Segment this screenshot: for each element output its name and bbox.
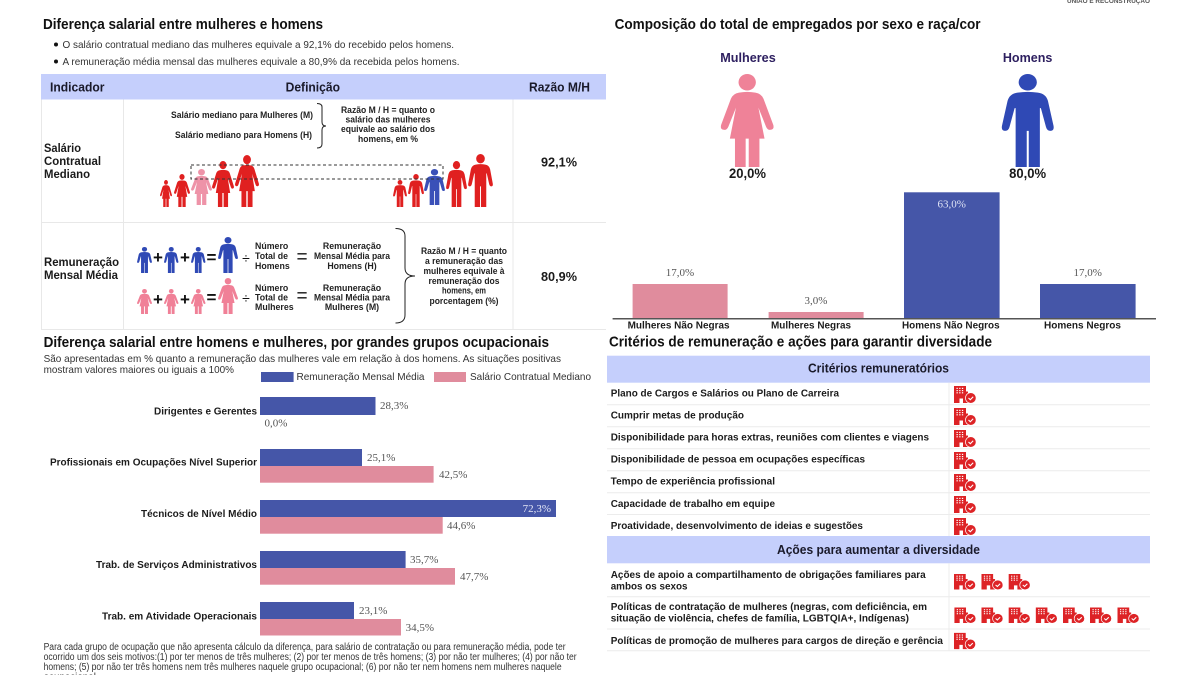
bullet list — [54, 39, 460, 68]
median definition text: Razão M / H = quanto o — [341, 105, 436, 115]
brace and ratio explanation: Razão M / H = quanto — [421, 246, 508, 256]
table: actions: Ações para aumentar a diversidade — [777, 542, 980, 557]
row label: remuneracao media: Remuneração — [44, 257, 119, 269]
heading: occupational groups: Diferença salarial entre homens e mulheres, por grandes grupos ocupacionais — [44, 334, 549, 351]
median definition text: equivale ao salário dos — [341, 124, 435, 134]
bar chart: occupations: 47,7% — [460, 571, 488, 583]
footnote: Para cada grupo de ocupação que não apresenta cálculo da diferença, para salário de contratação ou para remuneração média, pode ter — [44, 642, 566, 653]
action labels: Políticas de contratação de mulheres (negras, com deficiência, em — [611, 602, 927, 613]
equation: men: Homens (H) — [327, 261, 377, 271]
value: 92,1%: 92,1% — [541, 154, 577, 170]
bar chart: race and sex: Homens Não Negros — [902, 320, 1000, 332]
equation: women: = — [207, 288, 217, 307]
footnote: ocorrido um dos seis motivos:(1) por ter menos de três mulheres; (2) por ter menos de três homens; (3) por não ter mulheres; (4) por não ter — [44, 652, 577, 663]
bar chart: race and sex: Mulheres Negras — [771, 320, 851, 332]
bar chart: occupations: Trab. de Serviços Administrativos — [96, 560, 257, 571]
action labels — [611, 570, 943, 647]
row label: salario contratual — [44, 143, 101, 181]
bullet list: A remuneração média mensal das mulheres equivale a 80,9% da recebida pelos homens. — [62, 56, 460, 68]
brace and ratio explanation: remuneração dos — [428, 276, 500, 286]
equation: men: = — [296, 247, 308, 268]
equation: men — [137, 237, 390, 273]
bar chart: occupations: 42,5% — [439, 469, 467, 481]
bar chart: occupations: 0,0% — [264, 418, 287, 430]
equation: women: + — [180, 290, 190, 309]
heading: criteria: Critérios de remuneração e ações para garantir diversidade — [609, 334, 992, 351]
criteria labels: Disponibilidade de pessoa em ocupações específicas — [611, 455, 865, 466]
dashed median connector — [191, 165, 443, 179]
panel: salary gap — [41, 16, 606, 330]
bar chart: occupations: 35,7% — [410, 554, 438, 566]
footnote: homens; (5) por não ter três homens nem três mulheres naquele grupo ocupacional; (6) por não ter nem homens nem mulheres naquele — [44, 662, 562, 673]
explanatory text — [44, 353, 561, 376]
equation: women: = — [296, 286, 308, 307]
bar chart: occupations — [50, 397, 556, 636]
criteria labels — [611, 389, 929, 532]
men total: Homens — [1003, 50, 1052, 65]
brace and ratio explanation: mulheres equivale à — [424, 266, 505, 276]
median definition text: Salário mediano para Mulheres (M) — [171, 110, 313, 120]
equation: women: Mulheres — [255, 302, 294, 312]
action labels: ambos os sexos — [611, 582, 688, 592]
bar chart: occupations: Trab. em Atividade Operacionais — [102, 612, 257, 622]
bar chart: occupations: Técnicos de Nível Médio — [141, 509, 257, 520]
equation: women — [137, 278, 390, 314]
explanatory text: São apresentadas em % quanto a remuneração das mulheres vale em relação à dos homens. As situações positivas — [44, 353, 561, 365]
brace and ratio explanation: porcentagem (%) — [430, 296, 499, 306]
equation: men: Total de — [255, 251, 288, 261]
footnote — [44, 642, 577, 675]
bar chart: race and sex: 3,0% — [805, 295, 827, 307]
table: criteria — [607, 356, 1150, 536]
heading: composition: Composição do total de empregados por sexo e raça/cor — [615, 16, 981, 33]
median definition text: salário das mulheres — [346, 114, 431, 124]
icons: men ranked by salary — [393, 154, 493, 207]
bar chart: occupations: 23,1% — [359, 605, 387, 617]
panel: criteria and actions — [607, 334, 1150, 651]
row label: remuneracao media — [44, 257, 119, 282]
equation: men: Mensal Média para — [314, 251, 390, 261]
equation: women: ÷ — [242, 290, 250, 306]
bar chart: occupations: 28,3% — [380, 400, 408, 412]
median definition text: Salário mediano para Homens (H) — [175, 130, 312, 140]
action labels: Ações de apoio a compartilhamento de obrigações familiares para — [611, 570, 926, 581]
legend — [261, 371, 591, 383]
women total: Mulheres — [720, 50, 776, 65]
brace and ratio explanation: homens, em — [442, 286, 486, 296]
bar chart: race and sex — [613, 192, 1156, 332]
row label: salario contratual: Salário — [44, 143, 81, 155]
bar chart: occupations: Dirigentes e Gerentes — [154, 406, 257, 418]
table: criteria: Critérios remuneratórios — [808, 360, 949, 376]
bar chart: race and sex: 17,0% — [666, 267, 694, 279]
median definition text — [171, 104, 436, 148]
heading: salary gap: Diferença salarial entre mulheres e homens — [43, 16, 323, 33]
bar chart: race and sex: 17,0% — [1073, 267, 1102, 279]
action labels: Políticas de promoção de mulheres para cargos de direção e gerência — [611, 636, 943, 647]
equation: women: Mulheres (M) — [325, 302, 379, 312]
icons: companies per action — [954, 574, 1139, 650]
brace and ratio explanation — [396, 228, 508, 323]
equation: women: Remuneração — [323, 283, 382, 293]
table header: Indicador — [50, 80, 104, 94]
bar chart: occupations: Profissionais em Ocupações Nível Superior — [50, 458, 257, 468]
men total: 80,0% — [1009, 166, 1046, 181]
panel: occupational groups — [44, 334, 591, 675]
table: indicators — [41, 74, 606, 330]
row label: salario contratual: Contratual — [44, 156, 101, 168]
table header — [50, 80, 590, 94]
equation: women: Mensal Média para — [314, 292, 390, 302]
brace and ratio explanation: a remuneração das — [425, 256, 503, 266]
table header: Razão M/H — [529, 80, 590, 94]
action labels: situação de violência, chefes de família, LGBTQIA+, Indígenas) — [611, 614, 909, 625]
bar chart: occupations: 34,5% — [406, 622, 434, 634]
icons: women ranked by salary — [160, 155, 259, 207]
criteria labels: Disponibilidade para horas extras, reuniões com clientes e viagens — [611, 433, 929, 444]
equation: men: Homens — [255, 261, 290, 271]
criteria labels: Tempo de experiência profissional — [611, 477, 775, 488]
panel: composition — [613, 16, 1156, 332]
row label: remuneracao media: Mensal Média — [44, 270, 119, 282]
bar chart: race and sex: Homens Negros — [1044, 320, 1121, 332]
legend: Salário Contratual Mediano — [470, 371, 591, 383]
bar chart: race and sex: 63,0% — [937, 198, 966, 210]
bar chart: occupations: 25,1% — [367, 452, 395, 464]
row label: salario contratual: Mediano — [44, 169, 90, 181]
equation: men: = — [207, 248, 217, 267]
explanatory text: mostram valores maiores ou iguais a 100% — [44, 364, 234, 376]
equation: women: Número — [255, 283, 289, 293]
median definition text: homens, em % — [358, 134, 418, 144]
criteria labels: Plano de Cargos e Salários ou Plano de Carreira — [611, 389, 839, 400]
legend: Remuneração Mensal Média — [296, 371, 425, 383]
value: 80,9%: 80,9% — [541, 269, 577, 284]
equation: women: + — [153, 290, 163, 309]
equation: men: + — [153, 248, 163, 267]
bar chart: occupations: 72,3% — [523, 503, 551, 515]
women total — [720, 50, 776, 181]
equation: women: Total de — [255, 292, 288, 302]
equation: men: Número — [255, 241, 289, 251]
icons: companies per criterion — [954, 386, 976, 536]
criteria labels: Cumprir metas de produção — [611, 411, 744, 422]
men total — [1002, 50, 1054, 181]
bar chart: race and sex: Mulheres Não Negras — [628, 320, 730, 332]
equation: men: ÷ — [242, 250, 250, 266]
criteria labels: Proatividade, desenvolvimento de ideias e sugestões — [611, 521, 863, 532]
equation: men: Remuneração — [323, 241, 382, 251]
bar chart: occupations: 44,6% — [447, 520, 475, 532]
women total: 20,0% — [729, 166, 766, 181]
bullet list: O salário contratual mediano das mulheres equivale a 92,1% do recebido pelos homens. — [62, 39, 454, 51]
table header: Definição — [286, 80, 340, 94]
criteria labels: Capacidade de trabalho em equipe — [611, 499, 775, 510]
equation: men: + — [180, 248, 190, 267]
table: actions — [607, 536, 1150, 651]
